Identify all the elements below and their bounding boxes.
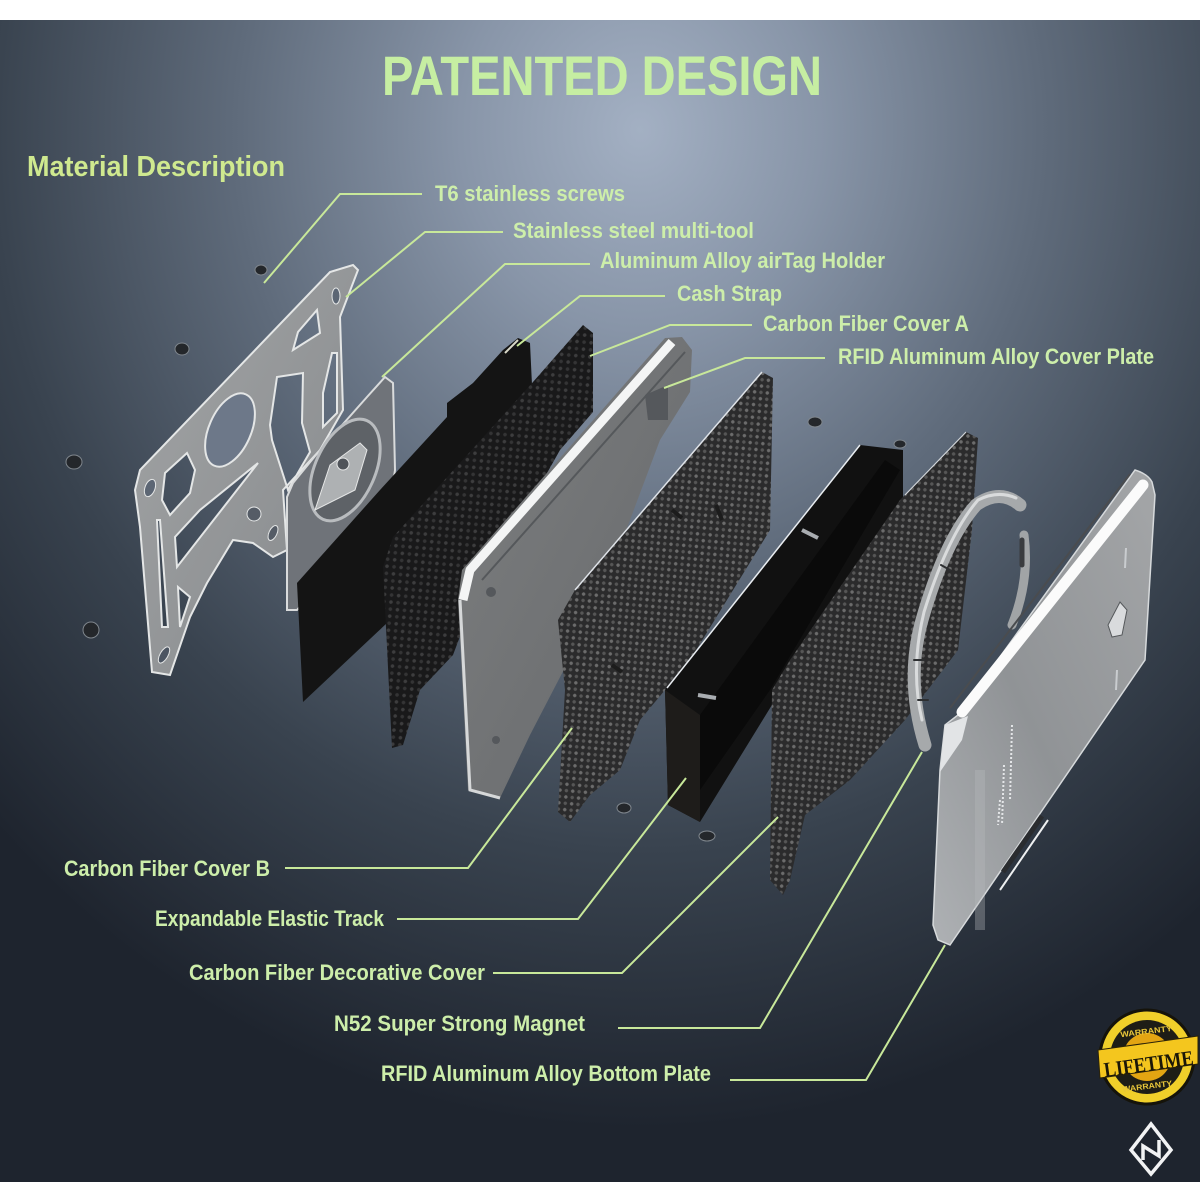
label: carbon fiber cover B: Carbon Fiber Cover B <box>64 856 270 881</box>
label: cash strap: Cash Strap <box>677 281 782 306</box>
part: carbon fiber cover B <box>558 372 773 822</box>
part: carbon fiber cover A <box>383 325 593 748</box>
title: PATENTED DESIGN <box>382 44 822 107</box>
icon: lifetime warranty badge: WARRANTY <box>1122 1079 1173 1094</box>
label: expandable elastic track: Expandable Elastic Track <box>155 906 385 931</box>
part: N52 super strong magnet <box>914 494 1026 745</box>
heading: material description: Material Description <box>27 151 285 183</box>
leader lines <box>264 194 945 1080</box>
label: bottom plate: RFID Aluminum Alloy Bottom Plate <box>381 1061 711 1086</box>
icon: lifetime warranty badge <box>1098 1010 1198 1104</box>
label: carbon fiber cover A: Carbon Fiber Cover A <box>763 311 969 336</box>
label: RFID cover plate: RFID Aluminum Alloy Cover Plate <box>838 344 1154 369</box>
label: T6 stainless screws: T6 stainless screws <box>435 181 625 206</box>
screws <box>66 265 906 841</box>
part: stainless steel multi-tool <box>135 265 358 675</box>
part: expandable elastic track <box>665 445 903 822</box>
label: decorative cover: Carbon Fiber Decorative Cover <box>189 960 485 985</box>
icon: lifetime warranty badge: WARRANTY <box>1120 1024 1173 1039</box>
label: stainless steel multi-tool: Stainless steel multi-tool <box>513 218 754 243</box>
exploded product illustration <box>66 265 1155 945</box>
part: carbon fiber decorative cover <box>770 432 978 895</box>
part: RFID aluminum alloy cover plate <box>458 337 692 798</box>
label: airTag holder: Aluminum Alloy airTag Holder <box>600 248 885 273</box>
part: cash strap <box>297 338 532 702</box>
part: aluminum alloy airTag holder <box>287 377 395 610</box>
label: N52 magnet: N52 Super Strong Magnet <box>334 1011 586 1036</box>
callout labels <box>64 181 1154 1086</box>
part: RFID aluminum alloy bottom plate <box>933 470 1155 945</box>
icon: brand logo <box>1131 1124 1171 1174</box>
